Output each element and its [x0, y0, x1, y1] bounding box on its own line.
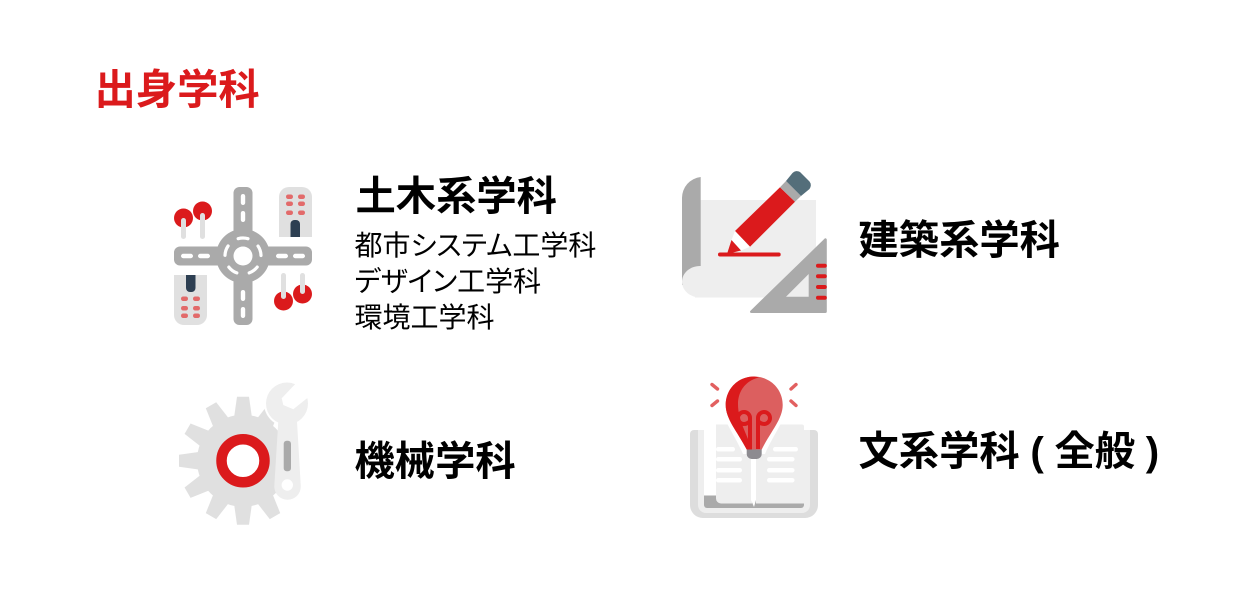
- heading: mechanical engineering: 機械学科: [354, 438, 516, 484]
- title: 出身学科: [94, 66, 260, 112]
- icon: blueprint with pencil and set square: [682, 171, 827, 313]
- heading: civil engineering: 土木系学科: [356, 174, 557, 218]
- icon: road intersection: [174, 187, 312, 325]
- text block: civil departments: 都市システム工学科: [354, 230, 596, 260]
- icon: gear and wrench: [179, 380, 312, 525]
- text block: civil departments: デザイン工学科: [354, 266, 541, 296]
- heading: humanities: 文系学科 ( 全般 ): [858, 428, 1159, 474]
- icon: book with light bulb: [690, 373, 818, 518]
- text block: civil departments: [354, 230, 596, 332]
- text block: civil departments: 環境工学科: [354, 302, 495, 332]
- heading: architecture: 建築系学科: [858, 218, 1060, 262]
